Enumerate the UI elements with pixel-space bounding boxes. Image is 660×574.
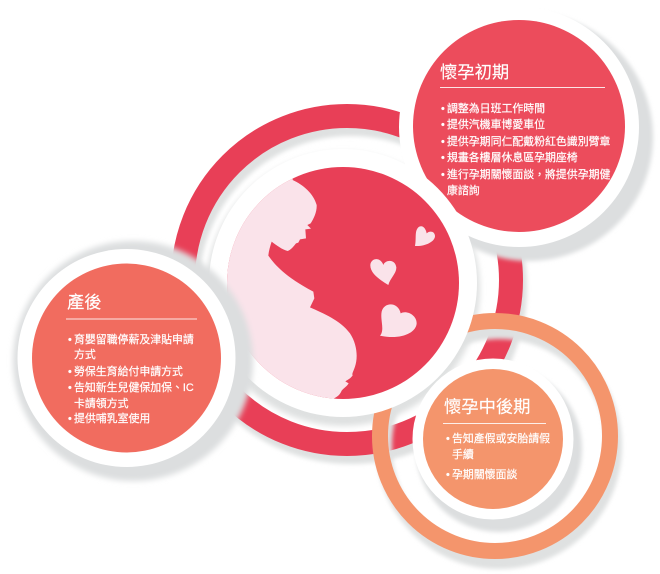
- list: 產後 items: 卡請領方式: [74, 396, 129, 410]
- list: 懷孕初期 items: 規畫各樓層休息區孕期座椅: [447, 150, 578, 164]
- list: 懷孕中後期 items: •: [446, 469, 450, 481]
- icon: heart middle: [370, 259, 396, 285]
- list: 產後 items: •: [68, 334, 72, 346]
- panel: 懷孕中後期: [412, 358, 582, 532]
- list: 產後 items: •: [68, 413, 72, 425]
- icon: heart top: [415, 226, 435, 246]
- list: 產後 items: •: [68, 366, 72, 378]
- list: 懷孕初期 items: 調整為日班工作時間: [447, 101, 545, 115]
- list: 懷孕初期 items: •: [441, 152, 445, 164]
- list: 懷孕初期 items: •: [441, 103, 445, 115]
- list: 產後 items: [68, 332, 194, 425]
- heading: 懷孕初期: 懷孕初期: [440, 62, 509, 82]
- list: 懷孕中後期 items: 告知產假或安胎請假: [452, 431, 550, 445]
- list: 懷孕初期 items: 提供孕期同仁配戴粉紅色識別臂章: [447, 134, 610, 148]
- central circle: [209, 149, 477, 417]
- silhouette: pregnant woman: [227, 178, 357, 398]
- large red ring: [183, 116, 515, 452]
- list: 產後 items: 告知新生兒健保加保、IC: [74, 380, 194, 394]
- list: 懷孕中後期 items: 手續: [452, 447, 474, 461]
- list: 產後 items: 育嬰留職停薪及津貼申請: [74, 332, 194, 346]
- list: 懷孕初期 items: •: [441, 136, 445, 148]
- list: 懷孕初期 items: •: [441, 119, 445, 131]
- list: 懷孕中後期 items: 孕期關懷面談: [452, 467, 517, 481]
- list: 懷孕初期 items: [441, 101, 610, 197]
- list: 產後 items: 方式: [74, 347, 96, 361]
- list: 懷孕初期 items: 進行孕期關懷面談，將提供孕期健: [447, 167, 610, 181]
- list: 懷孕中後期 items: [446, 431, 550, 481]
- list: 懷孕初期 items: •: [441, 169, 445, 181]
- panel: 懷孕初期: [399, 7, 653, 261]
- heading: 產後: 產後: [67, 292, 102, 312]
- orange ring: [380, 321, 614, 561]
- panel: 產後: [13, 241, 253, 481]
- icon: heart bottom: [380, 304, 417, 337]
- list: 懷孕初期 items: 康諮詢: [447, 183, 480, 197]
- list: 懷孕中後期 items: •: [446, 433, 450, 445]
- list: 懷孕初期 items: 提供汽機車博愛車位: [447, 117, 545, 131]
- list: 產後 items: •: [68, 382, 72, 394]
- list: 產後 items: 提供哺乳室使用: [74, 411, 150, 425]
- heading: 懷孕中後期: 懷孕中後期: [444, 396, 530, 416]
- list: 產後 items: 勞保生育給付申請方式: [74, 364, 183, 378]
